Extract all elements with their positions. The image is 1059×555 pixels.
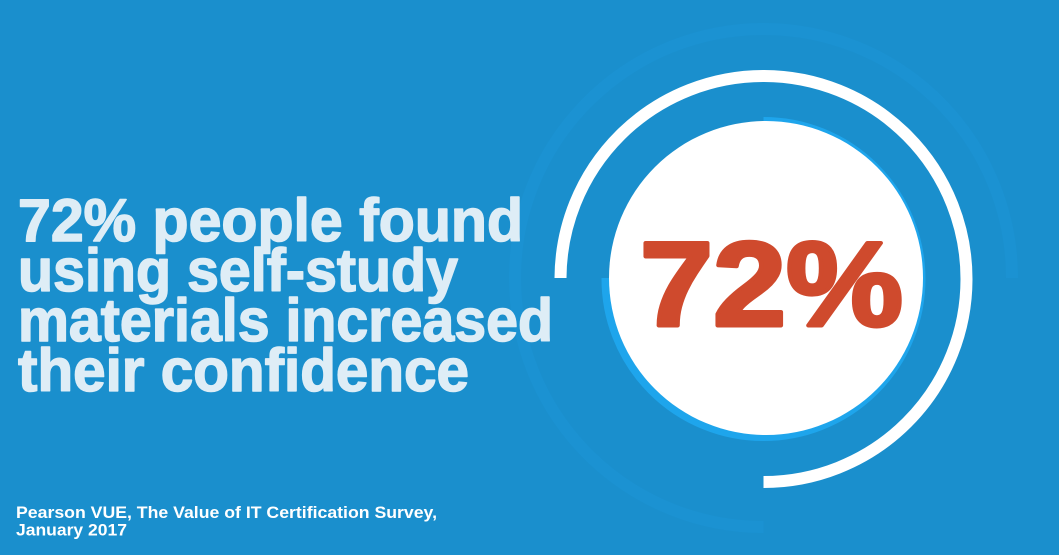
headline — [18, 187, 553, 404]
headline line 2: using self-study — [18, 237, 459, 304]
big percentage figure: 72% — [640, 218, 903, 352]
light blue inner arc — [605, 121, 921, 437]
white central circle — [609, 121, 923, 435]
faint outer arc — [515, 29, 1012, 527]
headline line 3: materials increased — [18, 287, 553, 354]
headline line 1: 72% people found — [18, 187, 523, 254]
headline line 4: their confidence — [18, 337, 469, 404]
white progress arc — [560, 76, 966, 482]
citation line 2: January 2017 — [16, 522, 127, 540]
source citation — [16, 504, 437, 540]
citation line 1: Pearson VUE, The Value of IT Certification Survey, — [16, 504, 437, 522]
